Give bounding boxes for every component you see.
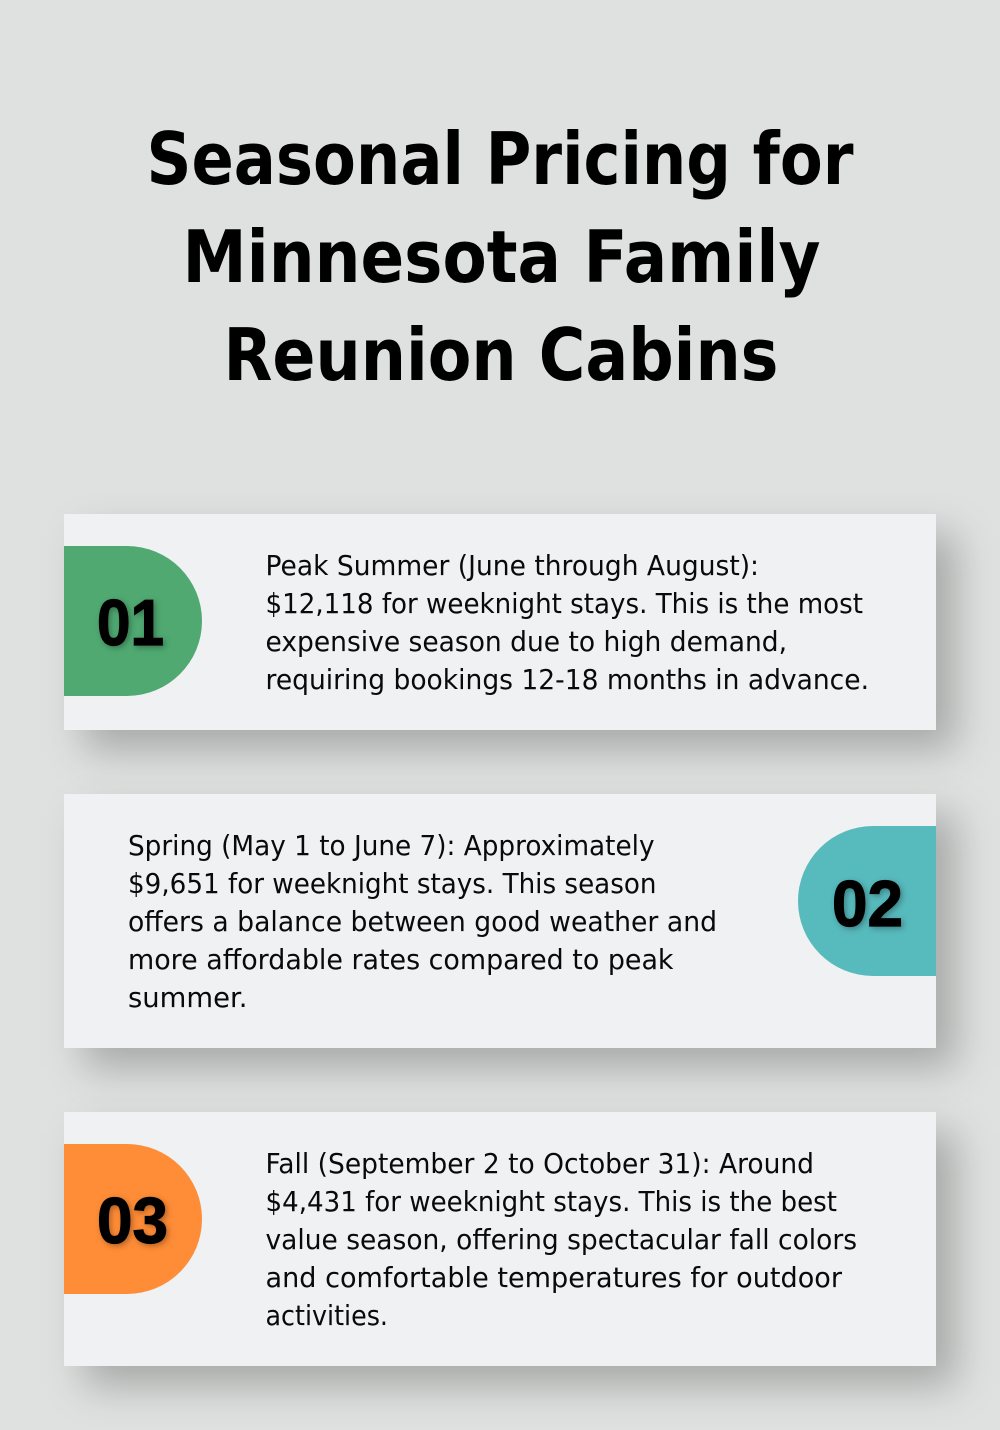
title <box>146 117 854 397</box>
text: peak summer description: requiring bookings 12-18 months in advance. <box>266 663 869 696</box>
title: Reunion Cabins <box>224 313 778 397</box>
text: fall description: and comfortable temperatures for outdoor <box>266 1261 843 1294</box>
text: peak summer description <box>266 549 869 696</box>
badge: 01: 01 <box>97 586 164 659</box>
text: spring description: more affordable rates compared to peak <box>128 943 674 976</box>
text: fall description: $4,431 for weeknight stays. This is the best <box>266 1185 837 1218</box>
text: spring description: offers a balance between good weather and <box>128 905 717 938</box>
text: fall description: value season, offering spectacular fall colors <box>266 1223 857 1256</box>
text: fall description: activities. <box>266 1299 388 1332</box>
panel: fall <box>64 1112 956 1386</box>
text: spring description: Spring (May 1 to June 7): Approximately <box>128 829 654 862</box>
panel: peak summer <box>64 514 956 750</box>
badge: 02: 02 <box>832 867 903 940</box>
badge: 03 <box>64 1144 202 1294</box>
text: spring description: $9,651 for weeknight stays. This season <box>128 867 656 900</box>
badge: 01 <box>64 546 202 696</box>
text: spring description: summer. <box>128 981 248 1014</box>
panel: spring <box>64 794 956 1068</box>
text: spring description <box>128 829 717 1014</box>
text: peak summer description: expensive season due to high demand, <box>266 625 787 658</box>
title: Seasonal Pricing for <box>146 117 854 201</box>
badge: 03: 03 <box>97 1184 168 1257</box>
text: fall description <box>266 1147 857 1332</box>
text: peak summer description: $12,118 for weeknight stays. This is the most <box>266 587 863 620</box>
badge: 02 <box>798 826 936 976</box>
text: fall description: Fall (September 2 to October 31): Around <box>266 1147 814 1180</box>
text: peak summer description: Peak Summer (June through August): <box>266 549 759 582</box>
title: Minnesota Family <box>182 215 820 299</box>
